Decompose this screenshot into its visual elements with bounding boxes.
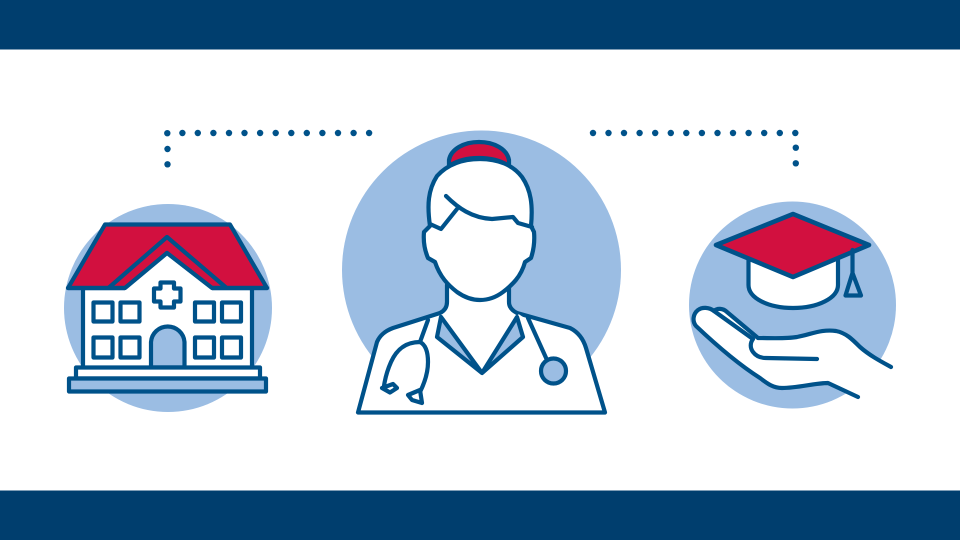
hospital building walls <box>83 288 252 368</box>
bottom banner <box>0 490 960 540</box>
hospital roof <box>68 224 267 288</box>
hospital cross <box>154 282 180 308</box>
nurse head <box>424 159 534 300</box>
stethoscope <box>384 318 547 392</box>
top banner <box>0 0 960 50</box>
hospital base <box>69 378 266 392</box>
nurse hair bun <box>449 142 509 166</box>
hospital door <box>151 326 184 368</box>
stethoscope chest piece <box>541 358 566 384</box>
hand fingers and thumb <box>714 311 817 359</box>
hospital steps <box>76 368 260 378</box>
nurse background circle <box>342 130 621 410</box>
icon: hospital <box>64 204 272 412</box>
icon: graduation cap in hand <box>689 202 900 408</box>
hospital background circle <box>64 204 272 412</box>
hospital gable wall <box>125 254 212 292</box>
hand <box>694 308 900 400</box>
hospital gable <box>68 237 267 288</box>
stethoscope ear tips <box>382 384 422 403</box>
icon: nurse <box>342 130 621 412</box>
cap background circle <box>689 202 896 408</box>
cap tassel <box>846 250 861 296</box>
nurse collar <box>437 317 523 373</box>
nurse neck <box>440 285 523 373</box>
left dotted connector <box>164 130 372 168</box>
nurse hair fringe <box>430 196 532 229</box>
nurse coat <box>358 313 605 412</box>
right dotted connector <box>590 130 799 166</box>
cap board <box>716 214 869 277</box>
hospital windows <box>94 302 241 358</box>
cap body <box>748 258 838 308</box>
